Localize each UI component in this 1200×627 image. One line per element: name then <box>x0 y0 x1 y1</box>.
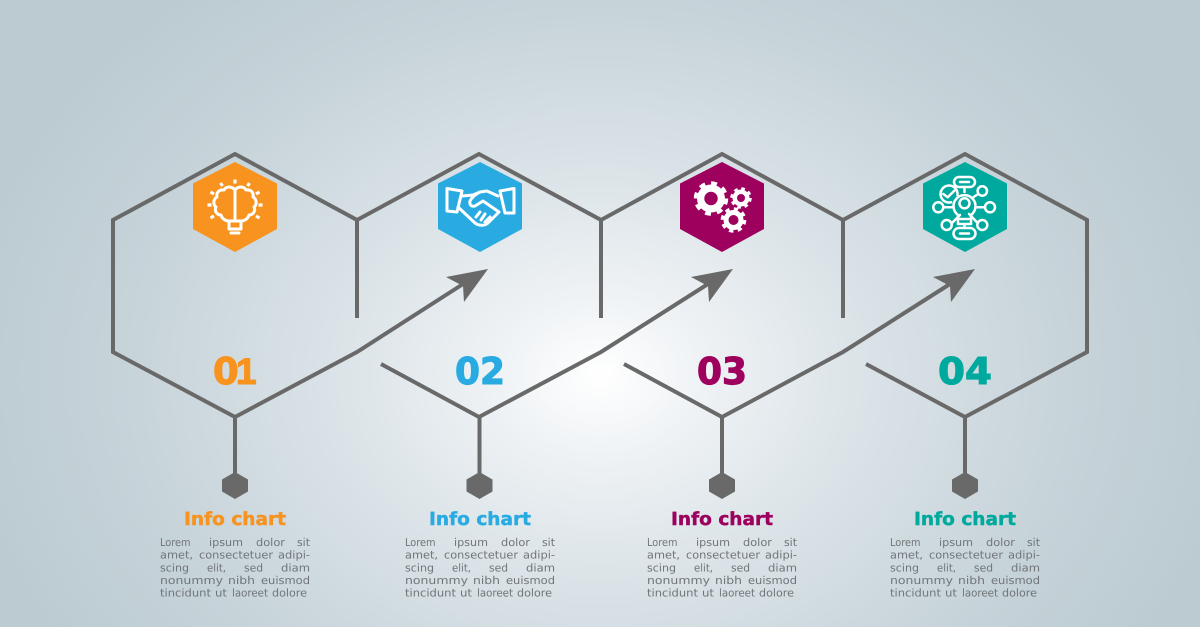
icon: handshake <box>438 162 522 252</box>
body text: scing <box>405 561 434 574</box>
body text: amet, <box>647 549 680 562</box>
body text: diam <box>281 561 310 574</box>
body text: tincidunt <box>890 587 941 600</box>
panel: step 2 <box>405 162 555 600</box>
body text: diam <box>1011 561 1040 574</box>
body text: Lorem <box>160 536 190 549</box>
body text: dolor <box>256 536 286 549</box>
node hexagon <box>952 472 978 499</box>
body text: ut <box>215 587 227 600</box>
body text: laoreet <box>962 587 998 600</box>
body text <box>405 536 555 600</box>
hexagon chain outline <box>113 154 1087 417</box>
body text: elit, <box>694 561 713 574</box>
body text: sit <box>297 536 310 549</box>
body text: tincidunt <box>160 587 211 600</box>
body text: nibh <box>473 574 500 587</box>
body text: ipsum <box>209 536 243 549</box>
icon: brain light bulb <box>193 162 277 252</box>
body text: ipsum <box>454 536 488 549</box>
body text: dolor <box>501 536 531 549</box>
body text: sit <box>1027 536 1040 549</box>
body text: euismod <box>748 574 797 587</box>
icon: idea mind map <box>923 162 1007 252</box>
body text: elit, <box>452 561 471 574</box>
body text: sit <box>784 536 797 549</box>
body text: amet, <box>160 549 193 562</box>
node hexagon <box>466 472 492 499</box>
number 04: 04 <box>938 350 992 393</box>
body text: ut <box>945 587 957 600</box>
heading: Info chart <box>671 509 773 530</box>
body text <box>890 536 1040 600</box>
body text: sit <box>542 536 555 549</box>
body text: amet, <box>890 549 923 562</box>
body text <box>647 536 797 600</box>
body text: dolor <box>743 536 773 549</box>
body text: adipi- <box>278 549 310 562</box>
number 01: 1 <box>236 351 257 392</box>
body text: laoreet <box>719 587 755 600</box>
body text: nonummy <box>405 574 469 587</box>
body text: sed <box>731 561 750 574</box>
connector stem <box>233 417 237 480</box>
body text: consectetuer <box>444 549 519 562</box>
number 01: 0 <box>213 350 239 393</box>
body text: sed <box>974 561 993 574</box>
number 02: 02 <box>455 350 505 393</box>
panel: step 1 <box>160 162 310 600</box>
body text: nibh <box>958 574 985 587</box>
body text: adipi- <box>1008 549 1040 562</box>
body text: consectetuer <box>686 549 761 562</box>
body text: ut <box>702 587 714 600</box>
body text: dolor <box>986 536 1016 549</box>
body text: laoreet <box>477 587 513 600</box>
body text: dolore <box>272 587 307 600</box>
body text: sed <box>489 561 508 574</box>
body text: laoreet <box>232 587 268 600</box>
body text: dolore <box>517 587 552 600</box>
body text: nibh <box>228 574 255 587</box>
panel: step 4 <box>890 162 1040 600</box>
connector stem <box>478 417 482 480</box>
body text: tincidunt <box>647 587 698 600</box>
body text: adipi- <box>523 549 555 562</box>
body text: sed <box>244 561 263 574</box>
heading: Info chart <box>429 509 531 530</box>
body text: scing <box>890 561 919 574</box>
connector stem <box>963 417 967 480</box>
body text: scing <box>647 561 676 574</box>
body text: euismod <box>261 574 310 587</box>
body text: diam <box>526 561 555 574</box>
body text: tincidunt <box>405 587 456 600</box>
body text: dolore <box>1002 587 1037 600</box>
node hexagon <box>222 472 248 499</box>
heading: Info chart <box>914 509 1016 530</box>
node hexagon <box>709 472 735 499</box>
body text: scing <box>160 561 189 574</box>
arrow 2 <box>691 269 733 302</box>
body text: nonummy <box>160 574 224 587</box>
body text: dolore <box>759 587 794 600</box>
body text: consectetuer <box>199 549 274 562</box>
body text: nonummy <box>890 574 954 587</box>
body text: euismod <box>506 574 555 587</box>
heading: Info chart <box>184 509 286 530</box>
body text: adipi- <box>765 549 797 562</box>
body text: amet, <box>405 549 438 562</box>
body text: diam <box>768 561 797 574</box>
body text: ipsum <box>696 536 730 549</box>
body text: Lorem <box>647 536 678 549</box>
body text: elit, <box>207 561 226 574</box>
connector stem <box>720 417 724 480</box>
arrow 1 <box>446 269 488 302</box>
body text: Lorem <box>890 536 920 549</box>
arrow 3 <box>933 269 975 302</box>
body text: ut <box>460 587 472 600</box>
body text: consectetuer <box>929 549 1004 562</box>
body text: ipsum <box>939 536 973 549</box>
body text <box>160 536 310 600</box>
panel: step 3 <box>647 162 797 600</box>
body text: elit, <box>937 561 956 574</box>
body text: nibh <box>715 574 742 587</box>
body text: euismod <box>991 574 1040 587</box>
icon: gears <box>680 162 764 252</box>
number 03: 03 <box>697 350 747 393</box>
body text: Lorem <box>405 536 436 549</box>
body text: nonummy <box>647 574 711 587</box>
